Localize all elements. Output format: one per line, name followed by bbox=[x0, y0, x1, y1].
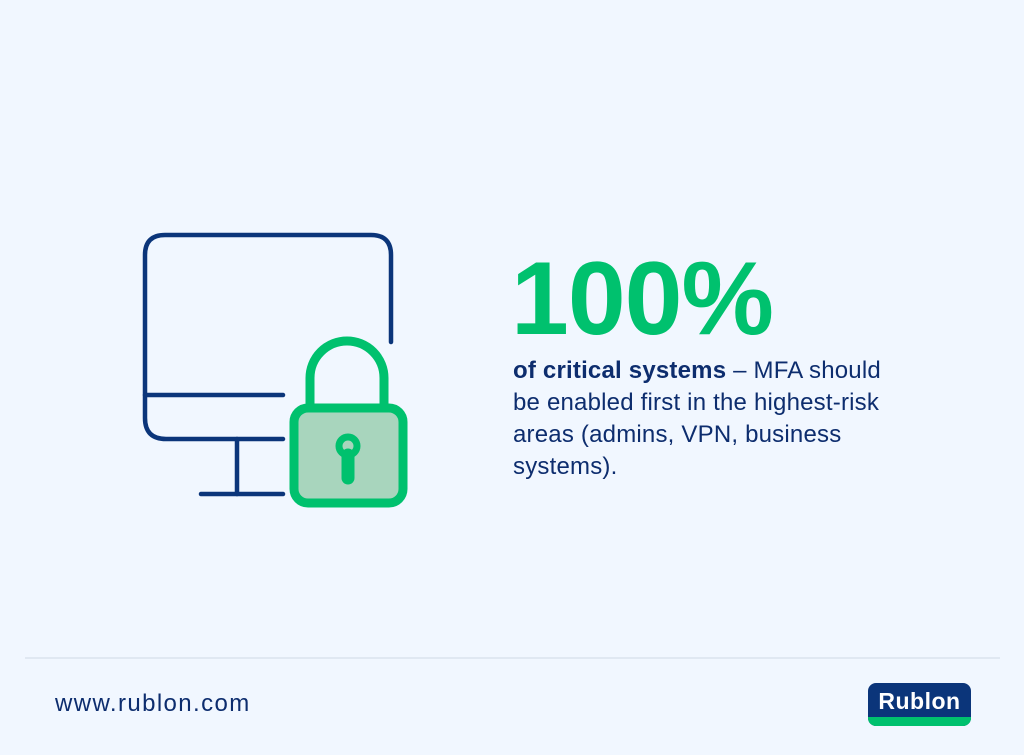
text block bbox=[513, 357, 881, 480]
stat: 100%: 100% bbox=[511, 241, 773, 357]
text block: systems). bbox=[513, 453, 617, 480]
text block: be enabled first in the highest-risk bbox=[513, 389, 879, 416]
footer url: www.rublon.com bbox=[55, 690, 251, 717]
logo: Rublon bbox=[868, 683, 971, 726]
logo: Rublon: Rublon bbox=[878, 688, 961, 714]
text block: of critical systems – MFA should bbox=[513, 357, 881, 384]
padlock bbox=[294, 341, 403, 503]
text block: areas (admins, VPN, business bbox=[513, 421, 841, 448]
monitor bbox=[145, 235, 391, 494]
